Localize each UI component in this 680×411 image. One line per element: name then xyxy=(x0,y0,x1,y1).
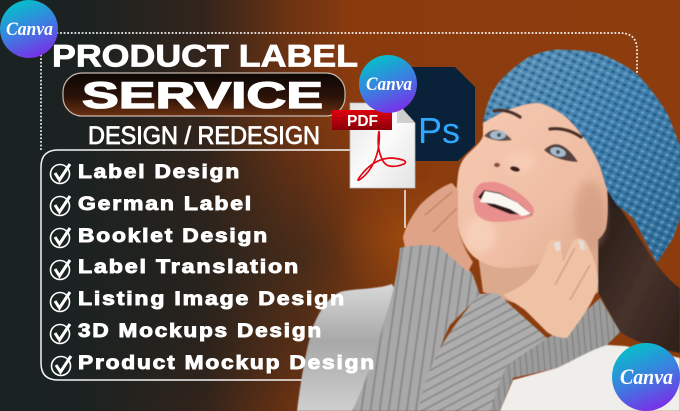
check icons xyxy=(50,164,71,376)
icon: check 3 xyxy=(50,228,70,248)
item: label translation: Label Translation xyxy=(78,257,300,278)
list panel outline xyxy=(41,150,405,380)
hat xyxy=(483,50,680,263)
icon: canva badge top left: Canva xyxy=(6,19,53,40)
icon: photoshop xyxy=(403,67,475,161)
mouth xyxy=(473,182,534,222)
icon: canva badge center xyxy=(359,55,417,113)
service pill: SERVICE xyxy=(82,75,323,116)
item: product mockup design: Product Mockup Design xyxy=(78,353,376,374)
icon: photoshop: Ps xyxy=(418,110,460,151)
icon: check 5 xyxy=(50,292,70,312)
icon: canva badge bottom right xyxy=(612,343,680,411)
subtitle: DESIGN / REDESIGN xyxy=(88,122,320,150)
sweater sleeve left xyxy=(352,245,480,411)
title: product label: PRODUCT LABEL xyxy=(52,38,358,74)
right hand xyxy=(503,238,598,338)
nose xyxy=(504,151,536,173)
icon: check 1 xyxy=(50,164,70,184)
icon: pdf document xyxy=(332,103,415,188)
neck xyxy=(478,225,598,325)
icon: check 6 xyxy=(50,324,70,344)
icon: check 2 xyxy=(50,196,70,216)
eyes and brows xyxy=(494,110,520,117)
fur collar right xyxy=(500,345,680,411)
icon: check 7 xyxy=(52,356,71,376)
icon: pdf document: PDF xyxy=(347,113,378,130)
face xyxy=(456,103,608,268)
dotted frame xyxy=(41,33,637,150)
left hand xyxy=(403,183,473,272)
woman illustration xyxy=(297,50,680,411)
item: 3d mockups design: 3D Mockups Design xyxy=(78,321,323,342)
turtleneck xyxy=(440,295,620,411)
service pill xyxy=(63,73,345,116)
item: german label: German Label xyxy=(78,194,253,215)
list items xyxy=(78,162,376,374)
icon: check 4 xyxy=(50,260,70,280)
item: booklet design: Booklet Design xyxy=(78,226,269,247)
item: label design: Label Design xyxy=(78,162,241,183)
sweater sleeve right xyxy=(418,293,547,411)
item: listing image design: Listing Image Design xyxy=(78,289,346,310)
hair xyxy=(598,190,680,353)
icon: canva badge center: Canva xyxy=(366,74,412,95)
icon: canva badge bottom right: Canva xyxy=(620,364,673,389)
icon: canva badge top left xyxy=(0,0,58,58)
fur collar left xyxy=(297,284,400,411)
